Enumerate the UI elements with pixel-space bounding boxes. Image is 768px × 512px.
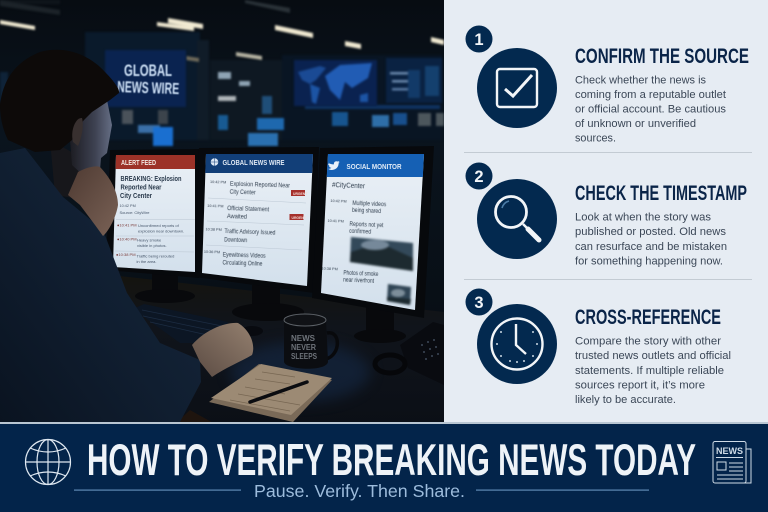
icon: globe [26, 440, 70, 484]
monitor 1: alert feed: Heavy smoke [137, 238, 162, 242]
monitor 3: social monitor: Multiple videos [352, 200, 386, 208]
monitor 3: social monitor: Photos of smoke [343, 270, 379, 278]
description: Check whether the news is [575, 74, 707, 86]
monitor stands [135, 272, 406, 343]
monitor 2: global news wire: City Center [230, 189, 256, 196]
keyboard [133, 304, 228, 343]
icon: newspaper: NEWS [716, 446, 743, 457]
ceiling lights [0, 0, 444, 62]
number badge 1 [466, 26, 492, 52]
pen [250, 382, 307, 402]
monitor 1: alert feed: 10:42 PM [120, 204, 136, 208]
monitor 2: global news wire: Awaited [227, 213, 247, 221]
urgent tags: URGENT [293, 192, 308, 196]
banner [0, 422, 768, 512]
desk phone [375, 322, 444, 385]
description: trusted news outlets and official [575, 350, 731, 362]
torso and arm [0, 148, 201, 424]
monitor 2: global news wire: 10:38 PM [205, 227, 222, 232]
monitor 2: global news wire: Official Statement [227, 205, 269, 213]
icon: magnifying glass [477, 179, 557, 259]
monitor 3: social monitor: 10:42 PM [330, 199, 347, 204]
description: coming from a reputable outlet [575, 89, 726, 101]
monitor 3: social monitor: confirmed [349, 228, 372, 236]
description: likely to be accurate. [575, 394, 676, 406]
monitor 1: alert feed: explosion near downtown. [138, 228, 184, 234]
monitor 2: global news wire: GLOBAL NEWS WIRE [222, 160, 285, 167]
wall screen: Global News Wire [105, 50, 186, 107]
monitor 1: alert feed: Unconfirmed reports of [138, 223, 180, 228]
description: published or posted. Old news [575, 226, 727, 238]
monitor 1: alert feed: BREAKING: Explosion [120, 174, 182, 183]
monitor 3: social monitor: SOCIAL MONITOR [346, 162, 402, 171]
newsroom background [0, 0, 444, 146]
mug: NEVER [291, 343, 316, 352]
monitor 1: alert feed: in the area. [136, 259, 157, 264]
photo: newsroom scene [0, 0, 444, 424]
number badge 3: 3 [474, 294, 484, 312]
neck [50, 140, 95, 200]
monitor 3: social monitor: Reports not yet [349, 221, 384, 229]
description: sources report it, it’s more [575, 380, 705, 392]
step 1: confirm the source [466, 26, 749, 144]
monitor 1: alert feed: ●10:38 PM [116, 252, 136, 257]
description: of unknown or unverified [575, 118, 696, 130]
monitor 1: alert feed: Traffic being rerouted [136, 254, 174, 258]
step 3: cross-reference [466, 288, 731, 406]
supporting hand [68, 166, 118, 236]
monitor 3: social monitor [321, 154, 424, 310]
monitor 3: social monitor: #CityCenter [332, 182, 366, 190]
urgent tags: URGENT [292, 216, 307, 220]
monitor 2: global news wire: 10:36 PM [204, 250, 220, 254]
monitor 1: alert feed: ALERT FEED [121, 160, 156, 167]
hair [0, 50, 119, 152]
description [575, 74, 727, 144]
icon: checkbox [477, 48, 557, 128]
ear [72, 118, 83, 146]
description: Compare the story with other [575, 336, 721, 348]
wall screen: Global News Wire: NEWS WIRE [117, 79, 180, 98]
description [575, 212, 727, 268]
wall screen: world map [294, 60, 377, 106]
monitor 1: alert feed: visible in photos. [137, 243, 167, 248]
mouse [241, 326, 263, 336]
icon: bird [328, 161, 340, 170]
monitor 3: social monitor: 10:38 PM [321, 267, 338, 271]
monitor 3: social monitor: being shared [352, 207, 381, 215]
monitor bezels [106, 146, 434, 318]
person [0, 50, 253, 424]
monitor 2: global news wire: 10:42 PM [210, 180, 226, 185]
monitor 1: alert feed: ●10:40 PM [117, 236, 137, 242]
desk edge shadow [175, 410, 215, 424]
face [70, 95, 112, 177]
icon: newspaper [713, 442, 751, 483]
description: Look at when the story was [575, 212, 712, 224]
monitor 3: social monitor: near riverfront [343, 277, 374, 285]
photo thumbnail: riverfront [387, 284, 411, 305]
mug [284, 314, 337, 369]
monitor 2: global news wire: Traffic Advisory Issued [224, 228, 276, 237]
wall screen: Global News Wire: GLOBAL [124, 61, 172, 80]
monitor 2: global news wire: 10:41 PM [207, 204, 224, 208]
monitor 2: global news wire: Downtown [224, 236, 248, 244]
monitor 2: global news wire [202, 154, 313, 286]
photo thumbnail: smoke [350, 237, 413, 271]
monitor 2: global news wire: Circulating Online [222, 259, 263, 268]
number badge 2: 2 [474, 168, 484, 186]
notebook [209, 364, 332, 422]
icon: clock [477, 304, 557, 384]
monitor 1: alert feed: ●10:41 PM [117, 222, 137, 228]
number badge 2 [466, 162, 492, 190]
description: statements. If multiple reliable [575, 365, 724, 377]
monitor 1: alert feed: Source: CityWire [120, 210, 150, 215]
step 2: check the timestamp [466, 162, 747, 268]
mug: SLEEPS [291, 352, 318, 361]
monitor 2: global news wire: Explosion Reported Near [230, 181, 291, 190]
description: sources. [575, 132, 616, 144]
description: or official account. Be cautious [575, 104, 727, 116]
description: for something happening now. [575, 256, 723, 268]
monitor 3: social monitor: 10:41 PM [327, 219, 344, 224]
subtitle: Pause. Verify. Then Share. [254, 481, 465, 501]
description [575, 336, 731, 406]
number badge 1: 1 [474, 31, 484, 49]
monitor 1: alert feed: Reported Near [120, 182, 162, 192]
number badge 3 [466, 288, 492, 316]
monitor 2: global news wire: Eyewitness Videos [223, 251, 266, 260]
wall screen: data board [386, 58, 442, 103]
description: can resurface and be mistaken [575, 241, 727, 253]
mug: NEWS [291, 334, 316, 343]
panel: verification steps [444, 0, 768, 424]
monitor 1: alert feed [113, 155, 195, 272]
urgent tags [290, 190, 308, 220]
hand on mouse [192, 323, 253, 377]
monitor 1: alert feed: City Center [120, 191, 152, 200]
desk [110, 275, 444, 424]
